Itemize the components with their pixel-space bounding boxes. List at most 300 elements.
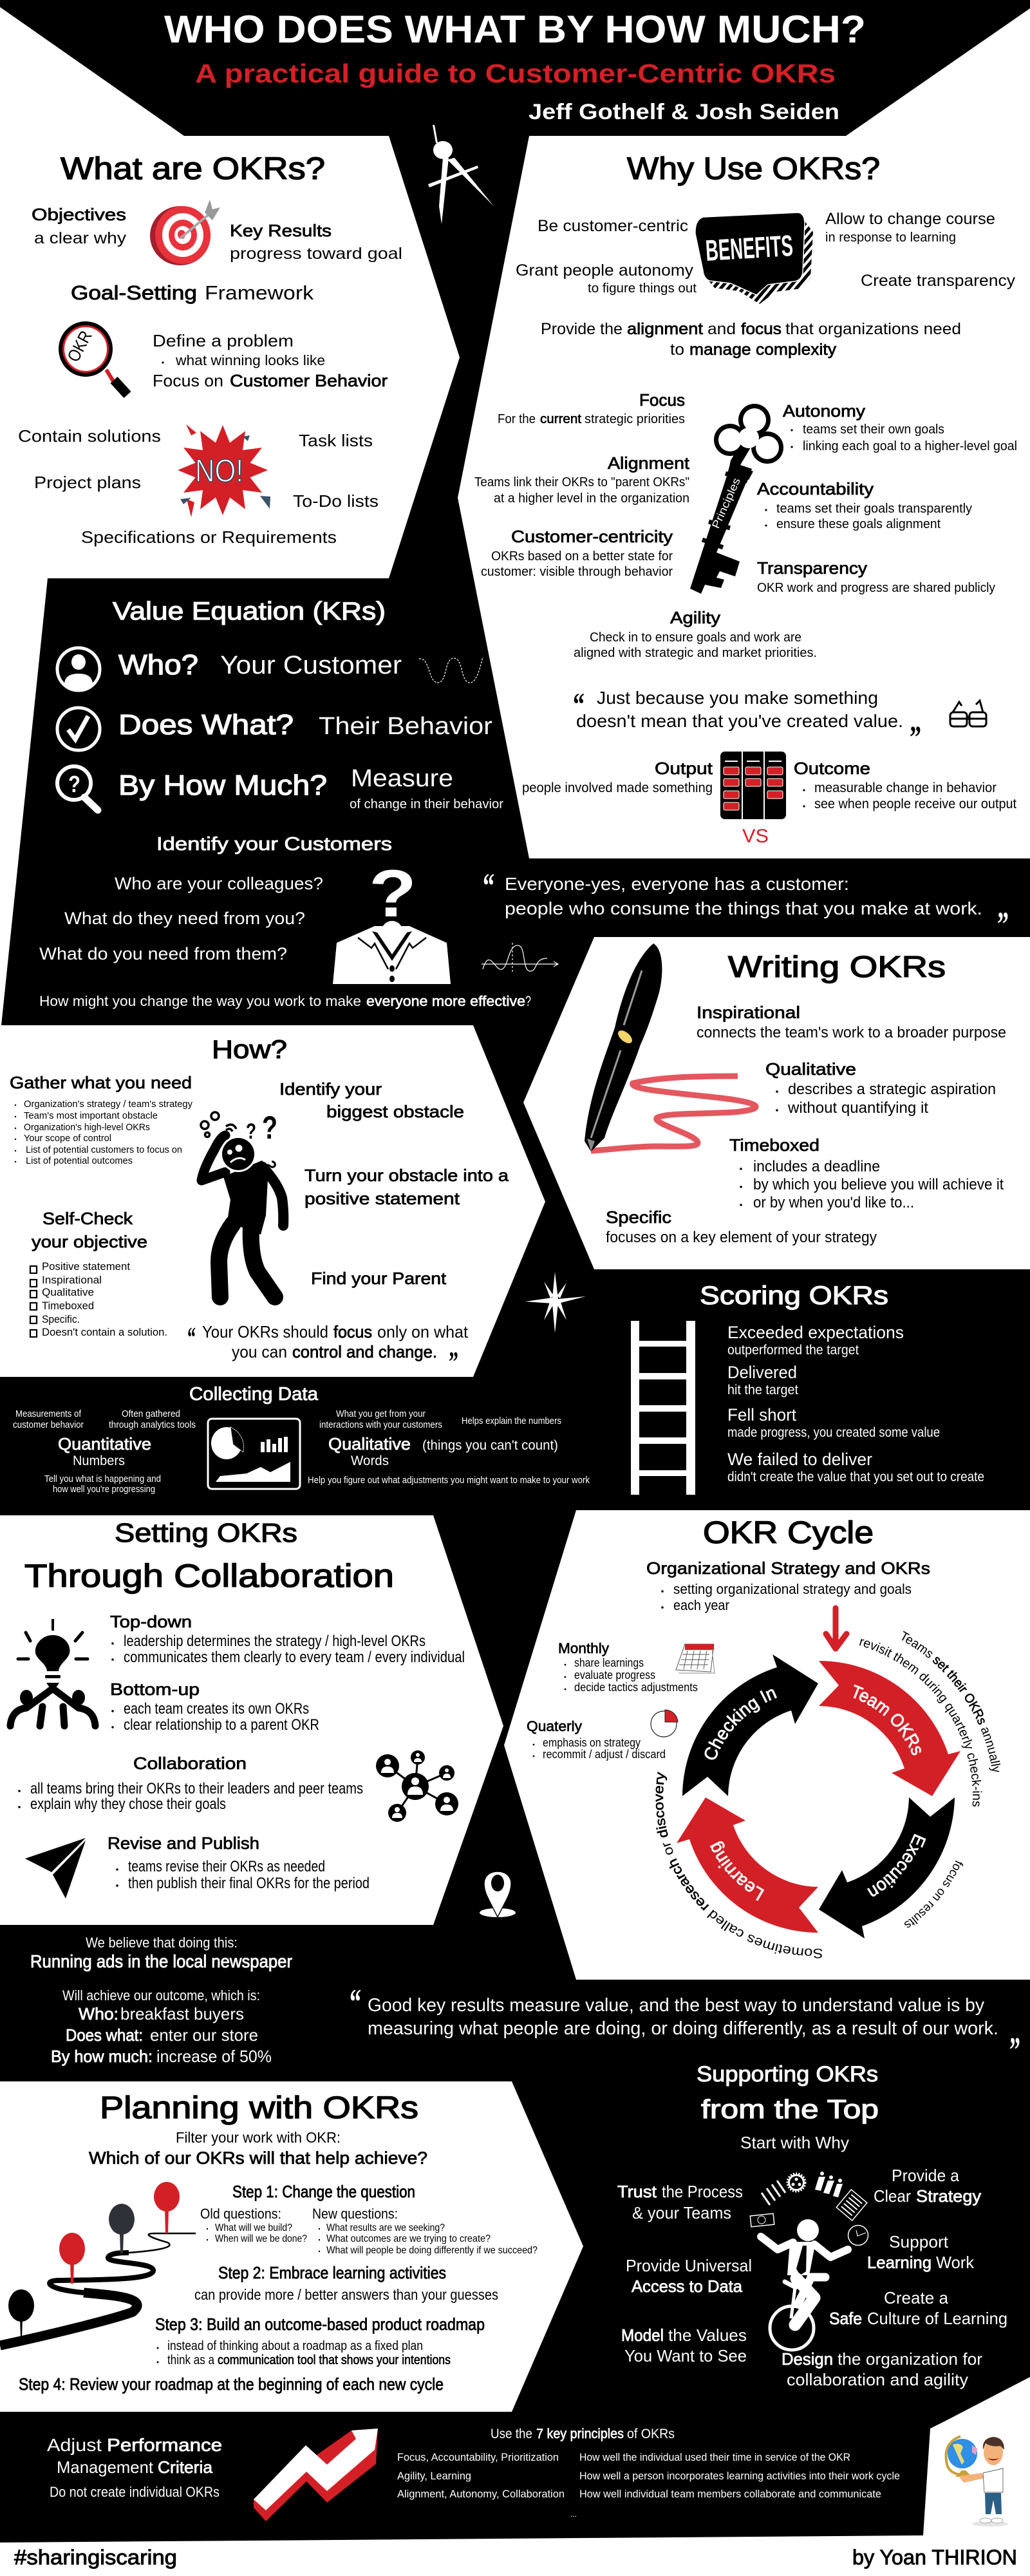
text: outcome details (51, 1987, 272, 2066)
text: benefits left: Be customer-centric (538, 217, 688, 235)
text: timeboxed: includes a deadline (753, 1158, 880, 1175)
text: adjust performance: Performance (107, 2435, 222, 2455)
text: 7 key principles: 7 key principles (536, 2427, 624, 2441)
text: qualitative: Words (351, 1454, 389, 1468)
text: customer questions: Who are your colleagues? (115, 874, 323, 893)
callout: everyone has a customer: Everyone-yes, everyone has a customer: (505, 874, 849, 894)
heading: Goal-Setting Framework: Goal-Setting (71, 281, 197, 304)
text: quantitative: customer behavior (13, 1419, 84, 1430)
text: timeboxed: Timeboxed (729, 1135, 819, 1155)
text: alignment and focus statement: that organizations need (785, 320, 961, 338)
text: hashtag: #sharingiscaring (14, 2546, 177, 2569)
text: what OKRs are not: Specifications or Requirements (81, 527, 337, 547)
text: how steps: biggest obstacle (326, 1102, 464, 1121)
text: what OKRs are not (18, 426, 379, 547)
text: left actions (617, 2182, 752, 2365)
text: gather what you need: Your scope of control (24, 1133, 111, 1144)
text: customer questions (39, 874, 323, 963)
text: gather what you need: List of potential customers to focus on (26, 1144, 182, 1155)
row: by how much: of change in their behavior (350, 797, 503, 811)
text: 7 key principles (397, 2427, 900, 2519)
text: define a problem: Define a problem (153, 331, 294, 350)
text: score levels: Exceeded expectations (727, 1323, 904, 1342)
text: benefits left (516, 217, 697, 296)
callout: focus on what you can control: ” (449, 1346, 458, 1378)
text: gather what you need: List of potential outcomes (26, 1155, 133, 1166)
text: gather what you need: Organization's high-level OKRs (24, 1122, 150, 1133)
chart: OKR cycle arrows (677, 1654, 960, 1938)
text: right actions: Learning (867, 2253, 932, 2272)
callout: focus on what you can control (187, 1321, 469, 1378)
heading: Planning with OKRs: Planning with OKRs (100, 2091, 418, 2125)
text: revise and publish: teams revise their OKRs as needed (128, 1858, 325, 1875)
row: who: Your Customer (220, 651, 402, 679)
text: score levels: Fell short (727, 1405, 796, 1425)
text: self-check checklist: Specific. (42, 1313, 80, 1325)
text: objectives: a clear why (34, 229, 127, 247)
text: quantitative (13, 1408, 196, 1495)
text: qualitative: What you get from your (336, 1408, 426, 1419)
text: outcome details: Who: (79, 2004, 118, 2023)
panel: Setting OKRs Through Collaboration (0, 1515, 503, 1925)
text: alignment and focus statement: focus (741, 320, 782, 338)
icon: map pin (480, 1871, 516, 1917)
heading: Writing OKRs: Writing OKRs (728, 950, 946, 983)
text: step 3: instead of thinking about a roadmap as a fixed plan (167, 2339, 423, 2353)
text: outcome (794, 759, 1016, 811)
text: collaboration (18, 1754, 363, 1813)
row: does what: Their Behavior (319, 713, 492, 740)
text: specific (606, 1208, 877, 1246)
callout: focus on what you can control: control and change. (292, 1342, 437, 1361)
text: adjust performance: Management (57, 2458, 154, 2477)
text: 7 key principles: How well individual team members collaborate and communicate (579, 2488, 881, 2500)
text: top-down: Top-down (110, 1612, 192, 1631)
text: outcome: Outcome (794, 759, 870, 778)
callout: everyone has a customer (483, 866, 1009, 943)
text: define a problem: Customer Behavior (230, 371, 388, 390)
text: outcome: see when people receive our output (814, 797, 1016, 811)
text: organizational strategy: each year (673, 1597, 729, 1613)
icon: fountain pen (585, 943, 662, 1151)
text: top-down: communicates them clearly to every team / every individual (124, 1649, 465, 1666)
text: research or discovery: Sometimes called research or discovery (655, 1771, 823, 1958)
principle: focus: strategic priorities (585, 412, 685, 426)
text: bottom-up: Bottom-up (110, 1680, 200, 1699)
text: key results: progress toward goal (230, 245, 402, 263)
panel: Adjust Performance Management Criteria (47, 2427, 900, 2521)
text: organizational strategy: setting organizational strategy and goals (673, 1581, 912, 1597)
icon: NO burst: NO! (195, 453, 243, 489)
text: effectiveness question: How might you change the way you work to make (39, 993, 361, 1009)
text: author credit: by Yoan THIRION (852, 2546, 1017, 2569)
text: collaboration: explain why they chose their goals (30, 1795, 226, 1813)
text: inspirational: connects the team's work to a broader purpose (697, 1024, 1006, 1041)
text: we believe: Running ads in the local newspaper (30, 1951, 292, 1971)
arrow: learning (677, 1797, 818, 1933)
arrow: team OKRs (819, 1661, 960, 1796)
heading: Goal-Setting Framework: Framework (205, 281, 314, 304)
text: quantitative: through analytics tools (109, 1419, 196, 1430)
text: effectiveness question: everyone more effective (366, 993, 525, 1009)
text: step 3: think as a (167, 2353, 215, 2367)
text: filter question (89, 2129, 427, 2168)
text: what OKRs are not: To-Do lists (293, 491, 379, 511)
callout: good key results quote: Good key results measure value, and the best way to understand value is by (368, 1995, 984, 2016)
text: left actions: Access to Data (632, 2277, 743, 2296)
text: monthly: decide tactics adjustments (574, 1681, 698, 1694)
principle: agility (574, 608, 817, 660)
heading: Goal-Setting Framework (71, 281, 314, 304)
text: right actions: Safe (829, 2309, 862, 2328)
text: how steps: Identify your (279, 1079, 382, 1099)
icon: road with pins (0, 2182, 196, 2345)
callout: focus on what you can control: you can (232, 1342, 287, 1361)
principle: autonomy: teams set their own goals (803, 422, 944, 437)
text: adjust performance: Do not create individual OKRs (50, 2484, 220, 2500)
icon: person with question mark (333, 857, 451, 984)
icon: confused stick figure: ? (246, 1119, 256, 1144)
text: quantitative: Tell you what is happening and (44, 1473, 161, 1484)
text: timeboxed: by which you believe you will achieve it (753, 1176, 1004, 1193)
text: specific: focuses on a key element of your strategy (606, 1229, 877, 1246)
text: score levels: made progress, you created some value (727, 1425, 940, 1440)
text: key results: Key Results (230, 221, 332, 240)
text: we believe (30, 1935, 292, 1971)
text: right actions: Create a (884, 2288, 949, 2307)
text: right actions: Culture of Learning (867, 2309, 1007, 2328)
text: output: people involved made something (522, 781, 713, 795)
callout: everyone has a customer: “ (483, 866, 494, 905)
text: self-check checklist (30, 1209, 167, 1338)
icon: glasses (950, 701, 986, 726)
principle: focus: current (540, 412, 581, 426)
text: monthly: Monthly (558, 1640, 609, 1656)
text: 7 key principles: How well a person incorporates learning activities into their work cycle (579, 2470, 900, 2482)
text: inspirational (697, 1003, 1006, 1041)
text: left actions: & your Teams (632, 2203, 731, 2222)
callout: focus on what you can control: focus (333, 1322, 372, 1341)
text: right actions: Work (936, 2253, 975, 2272)
arrow: checking in: Checking In (704, 1689, 777, 1759)
text: adjust performance: Adjust (47, 2435, 102, 2455)
text: quarterly: recommit / adjust / discard (543, 1748, 666, 1761)
arrow: red down arrow (826, 1608, 847, 1649)
text: left actions: You Want to See (624, 2346, 747, 2365)
text: gather what you need: Team's most important obstacle (24, 1110, 158, 1121)
text: quarterly check-ins: revisit them during quarterly check-ins (859, 1638, 982, 1807)
icon: target with arrow (150, 200, 220, 265)
text: step 1: What will people be doing differently if we succeed? (326, 2245, 538, 2256)
text: how steps: Turn your obstacle into a (304, 1166, 509, 1185)
text: benefits right (825, 210, 1016, 290)
text: monthly (558, 1640, 698, 1694)
text: we believe: We believe that doing this: (86, 1935, 238, 1951)
text: revise and publish: then publish their final OKRs for the period (128, 1875, 370, 1892)
text: objectives: Objectives (32, 205, 126, 224)
text: outcome: measurable change in behavior (814, 781, 997, 795)
principle: customer-centricity (481, 527, 673, 579)
text: step 3: communication tool that shows your intentions (218, 2353, 451, 2367)
icon: red scribble (591, 1076, 756, 1151)
icon: NO burst (178, 424, 270, 517)
panel: Writing OKRs (523, 937, 1030, 1269)
principle: accountability (757, 479, 972, 531)
row: does what (57, 708, 492, 750)
text: step 1 (200, 2182, 538, 2256)
text: gather what you need: Gather what you need (10, 1073, 192, 1092)
subtitle: A practical guide to Customer-Centric OKRs (195, 59, 836, 88)
icon: confused stick figure: ? (259, 1159, 280, 1171)
text: score levels: outperformed the target (727, 1343, 859, 1358)
panel: Why Use OKRs (458, 8, 1030, 858)
icon: lightbulb and team (10, 1619, 95, 1726)
panel: header (164, 8, 866, 124)
text: how steps (279, 1079, 509, 1288)
icon: paper plane (25, 1838, 86, 1899)
text: customer questions: What do they need from you? (64, 909, 305, 928)
principle: focus (498, 390, 685, 426)
panel: Collecting Data (13, 1384, 590, 1495)
arrow: team OKRs: Team OKRs (854, 1685, 921, 1756)
text: step 1: Step 1: Change the question (232, 2182, 415, 2201)
text: score levels: hit the target (727, 1383, 798, 1397)
text: qualitative: Help you figure out what adjustments you might want to make to your work (308, 1475, 590, 1486)
icon: confused stick figure (201, 1110, 283, 1297)
callout: everyone has a customer: people who consume the things that you make at work. (505, 898, 982, 918)
text: score levels: We failed to deliver (727, 1450, 872, 1469)
text: alignment and focus statement: Provide the (541, 320, 623, 338)
text: left actions: the Values (668, 2325, 747, 2345)
text: bottom-up (110, 1680, 319, 1734)
callout: quote about value: doesn't mean that you've created value. (576, 711, 903, 731)
text: step 1: New questions: (312, 2206, 398, 2222)
text: benefits right: Allow to change course (825, 210, 995, 228)
text: what OKRs are not: Project plans (34, 473, 141, 492)
text: step 4: Step 4: Review your roadmap at the beginning of each new cycle (19, 2374, 444, 2394)
text: step 1: When will we be done? (215, 2233, 307, 2244)
text: qualitative (308, 1408, 590, 1486)
text: revise and publish: Revise and Publish (108, 1833, 259, 1853)
principle: alignment (474, 453, 690, 506)
text: quarterly: emphasis on strategy (543, 1736, 641, 1749)
text: benefits left: Grant people autonomy (516, 261, 694, 279)
text: 7 key principles: Focus, Accountability, Prioritization (397, 2451, 559, 2463)
text: timeboxed: or by when you'd like to... (753, 1194, 914, 1211)
text: self-check checklist: Positive statement (42, 1260, 130, 1273)
text: score levels: Delivered (727, 1363, 797, 1382)
row: who: Who? (118, 649, 198, 681)
panel: hypothesis statement (30, 1935, 292, 2066)
icon: BENEFITS speech bubble (695, 213, 813, 304)
heading: What are OKRs: What are OKRs? (61, 152, 325, 186)
principle: transparency: Transparency (757, 558, 867, 578)
principle: alignment: Alignment (608, 453, 690, 473)
text: step 1: What will we build? (215, 2222, 292, 2233)
text: organizational strategy (646, 1558, 930, 1613)
callout: quote about value: Just because you make something (597, 688, 878, 708)
callout: good key results quote: measuring what people are doing, or doing differently, as a result of our work. (368, 2018, 998, 2039)
text: organizational strategy: Organizational Strategy and OKRs (646, 1558, 930, 1578)
text: bottom-up: each team creates its own OKRs (124, 1700, 309, 1718)
principle: accountability: ensure these goals alignment (776, 517, 941, 531)
callout: focus on what you can control: Your OKRs should (202, 1322, 328, 1341)
icon: calendar (676, 1644, 715, 1673)
text: qualitative: Qualitative (765, 1059, 856, 1079)
panel: How (10, 1036, 509, 1378)
label: VS: VS (742, 826, 769, 847)
principle: agility: aligned with strategic and market priorities. (574, 646, 817, 660)
text: focus on results: focus on results (904, 1861, 963, 1928)
panel: What are OKRs (0, 7, 545, 1377)
icon: growth arrow (254, 2429, 378, 2521)
icon: quarter pie (651, 1710, 678, 1737)
panel: Supporting OKRs from the Top (617, 2062, 1007, 2389)
callout: good key results quote: “ (350, 1982, 361, 2022)
text: top-down: leadership determines the strategy / high-level OKRs (124, 1633, 426, 1650)
icon: dashed wave (419, 657, 483, 683)
text: right actions: Design (782, 2349, 833, 2369)
heading: identify your customers: Identify your Customers (156, 834, 392, 855)
text: self-check checklist: Self-Check (42, 1209, 133, 1228)
text: define a problem (153, 331, 388, 390)
text: output (522, 759, 713, 795)
principle: transparency (757, 558, 995, 595)
icon: BENEFITS speech bubble: BENEFITS (704, 229, 794, 267)
text: collaboration: Collaboration (133, 1754, 247, 1773)
title: WHO DOES WHAT BY HOW MUCH? (164, 8, 866, 51)
text: define a problem: Focus on (153, 371, 223, 390)
row: does what: Does What? (118, 709, 294, 741)
row: by how much: By How Much? (118, 770, 327, 801)
arrow: execution (819, 1797, 955, 1938)
text: filter question: Which of our OKRs will that help achieve? (89, 2148, 427, 2168)
principle: agility: Agility (670, 608, 720, 627)
text: alignment and focus statement: alignment (627, 320, 703, 338)
text: qualitative: interactions with your customers (319, 1419, 442, 1430)
text: right actions: collaboration and agility (787, 2370, 968, 2389)
icon: compass star (525, 1272, 586, 1333)
principle: alignment: at a higher level in the organization (494, 491, 689, 506)
row: by how much (57, 765, 503, 811)
text: 7 key principles: Use the (491, 2427, 532, 2441)
text: left actions: Model (621, 2325, 664, 2345)
text: bottom-up: clear relationship to a parent OKR (124, 1716, 319, 1734)
heading: Scoring OKRs: Scoring OKRs (700, 1282, 888, 1310)
callout: quote about value (573, 686, 921, 755)
text: right actions: Clear (874, 2186, 911, 2206)
principle: customer-centricity: Customer-centricity (511, 527, 673, 546)
text: self-check checklist: Inspirational (42, 1274, 102, 1286)
text: collaboration: all teams bring their OKRs to their leaders and peer teams (30, 1780, 363, 1797)
text: step 1: What results are we seeking? (326, 2222, 445, 2233)
text: what OKRs are not: Task lists (299, 431, 373, 450)
icon: drawing compass (428, 125, 494, 224)
principle: accountability: teams set their goals transparently (776, 502, 972, 516)
callout: quote about value: ” (910, 719, 921, 755)
text: score levels: didn't create the value that you set out to create (727, 1470, 984, 1484)
text: teams set OKRs annually: Teams set their OKRs annually (901, 1631, 1000, 1772)
icon: person with question mark: ? (369, 857, 417, 931)
text: step 3 (155, 2315, 485, 2367)
icon: signal wave (482, 943, 558, 973)
panel: Value Equation (39, 598, 558, 1009)
text: self-check checklist: Doesn't contain a solution. (42, 1326, 167, 1338)
heading: How: How? (212, 1036, 287, 1064)
text: outcome details: Does what: (66, 2025, 143, 2045)
text: alignment and focus statement: and (707, 320, 736, 338)
heading: Supporting OKRs: Supporting OKRs (697, 2062, 878, 2087)
text: outcome details: Will achieve our outcome, which is: (62, 1987, 260, 2003)
principle: focus: Focus (639, 390, 685, 410)
icon: kanban board (720, 752, 786, 819)
text: quantitative: Often gathered (122, 1408, 180, 1419)
text: right actions (782, 2166, 1007, 2389)
icon: juggling unicyclist (750, 2172, 868, 2350)
icon: author avatar with globe (946, 2436, 1008, 2526)
arrow: checking in (682, 1654, 818, 1796)
text: right actions: Support (889, 2232, 949, 2251)
text: step 2: can provide more / better answers than your guesses (194, 2286, 498, 2303)
text: how steps: Find your Parent (311, 1269, 447, 1288)
row: who (57, 648, 402, 690)
text: benefits left: to figure things out (588, 281, 697, 296)
text: quarterly: Quaterly (527, 1718, 582, 1734)
text: left actions: Trust (617, 2182, 657, 2201)
text: qualitative: describes a strategic aspiration (788, 1081, 996, 1098)
text: outcome details: breakfast buyers (120, 2004, 244, 2023)
text: 7 key principles: How well the individual used their time in service of the OKR (579, 2451, 850, 2463)
text: customer questions: What do you need from them? (39, 944, 287, 963)
icon: confused stick figure: ? (262, 1110, 277, 1146)
icon: team network (376, 1750, 458, 1822)
row: by how much: ? (68, 771, 80, 797)
principle: accountability: Accountability (757, 479, 874, 498)
text: timeboxed (729, 1135, 1004, 1211)
panel: Scoring OKRs (631, 1282, 984, 1495)
icon: dashboard charts (208, 1419, 300, 1489)
text: 7 key principles: Agility, Learning (397, 2470, 471, 2482)
text: alignment and focus statement (541, 320, 961, 359)
text: objectives (32, 205, 127, 247)
text: monthly: share learnings (574, 1656, 644, 1669)
text: quantitative: Measurements of (15, 1408, 82, 1419)
text: define a problem: what winning looks like (175, 352, 325, 368)
heading: from the Top: from the Top (701, 2094, 879, 2124)
icon: principles key: Principles (709, 476, 743, 531)
principle: agility: Check in to ensure goals and work are (590, 630, 801, 645)
text: benefits right: Create transparency (861, 272, 1016, 290)
text: left actions: Provide Universal (626, 2256, 752, 2275)
arrow: learning: Learning (709, 1841, 765, 1901)
text: inspirational: Inspirational (697, 1003, 800, 1022)
text: benefits right: in response to learning (825, 231, 956, 245)
text: qualitative: without quantifying it (787, 1099, 928, 1117)
text: right actions: the organization for (838, 2349, 982, 2369)
text: start with why: Start with Why (740, 2133, 849, 2152)
heading: Value Equation: Value Equation (KRs) (113, 598, 386, 625)
text: adjust performance: Criteria (158, 2458, 213, 2477)
text: adjust performance (47, 2435, 222, 2500)
principle: alignment: Teams link their OKRs to "parent OKRs" (474, 475, 689, 489)
panel: footer (0, 2377, 1030, 2576)
icon: ladder (631, 1321, 695, 1495)
text: top-down (110, 1612, 465, 1666)
text: step 2: Step 2: Embrace learning activities (218, 2263, 446, 2282)
text: quantitative: Numbers (73, 1454, 125, 1468)
text: effectiveness question (39, 993, 531, 1009)
text: effectiveness question: ? (525, 993, 531, 1009)
